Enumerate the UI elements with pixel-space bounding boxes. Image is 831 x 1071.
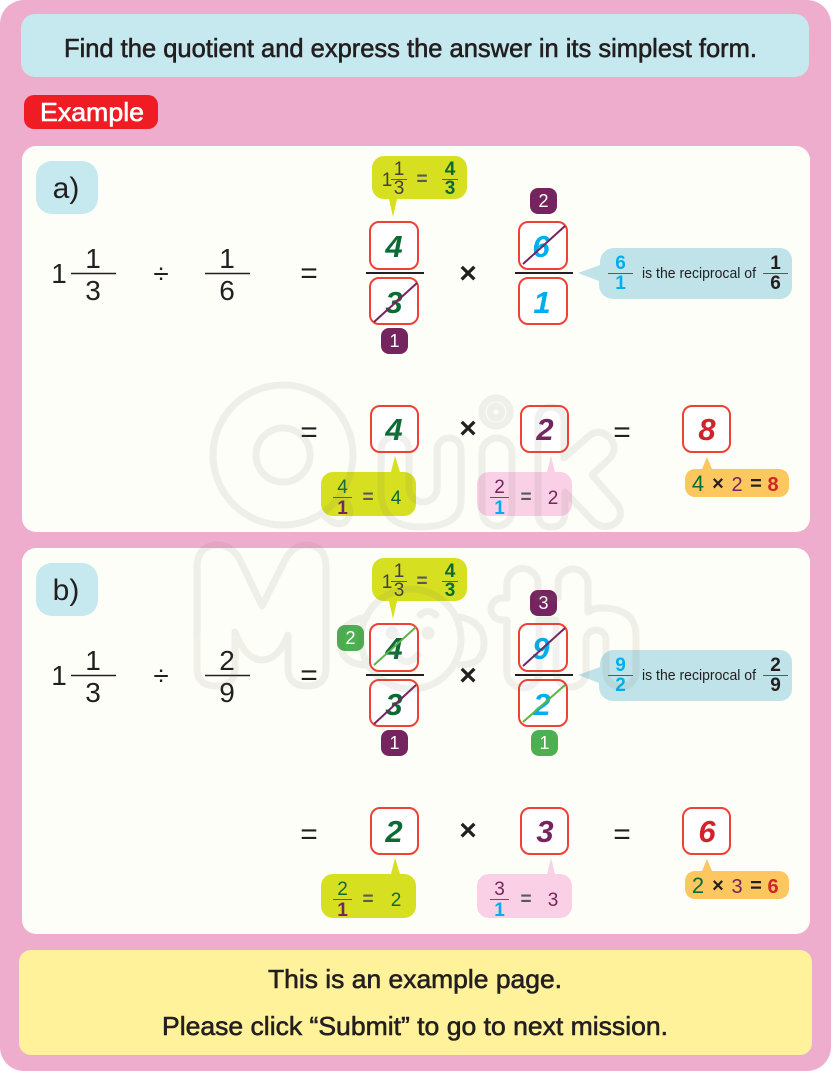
fraction four thirds with boxes bbox=[366, 222, 424, 324]
callout: reciprocal: 1 bbox=[615, 273, 626, 294]
answer box 2: 2 bbox=[384, 814, 403, 849]
callout: four over one: 4 bbox=[391, 488, 402, 509]
fraction two ninths: 9 bbox=[219, 677, 235, 708]
callout: product 4 x 2 = 8 bbox=[685, 457, 789, 497]
step badge 2: 2 bbox=[538, 191, 549, 211]
fraction two ninths: 2 bbox=[219, 645, 235, 676]
step badge green 1 bbox=[531, 730, 558, 756]
mixed number one and one third: 1 bbox=[85, 243, 101, 274]
fraction four thirds with boxes bbox=[366, 624, 424, 726]
callout: product 2 x 3 = 6 bbox=[685, 859, 789, 899]
fraction one sixth: 1 bbox=[219, 243, 235, 274]
callout: reciprocal: is the reciprocal of bbox=[642, 668, 757, 684]
callout: two over one: = bbox=[362, 889, 374, 910]
mixed number one and one third: 1 bbox=[85, 645, 101, 676]
watermark: QuikMath logo outline bbox=[197, 385, 636, 689]
multiply: × bbox=[459, 659, 477, 692]
callout: reciprocal: 9 bbox=[770, 675, 781, 696]
step badge 2 bbox=[530, 188, 557, 214]
heading panel: Find the quotient and express the answer in its simplest form. bbox=[64, 33, 757, 63]
callout: three over one: = bbox=[520, 889, 532, 910]
answer box 4: 4 bbox=[384, 412, 403, 447]
callout: product 4 x 2 = 8: 8 bbox=[767, 474, 779, 496]
callout: reciprocal: 2 bbox=[615, 675, 626, 696]
fraction nine over two with boxes bbox=[515, 624, 573, 726]
multiply: × bbox=[459, 412, 477, 445]
callout: product 4 x 2 = 8: 2 bbox=[731, 474, 743, 496]
answer box 3: 3 bbox=[536, 814, 554, 849]
panel: example b bbox=[22, 548, 810, 934]
answer box 2 bbox=[521, 406, 568, 452]
fraction six over one with boxes: 6 bbox=[532, 229, 550, 264]
callout: product 2 x 3 = 6: × bbox=[712, 875, 724, 897]
callout: reciprocal: 6 bbox=[615, 253, 626, 274]
mixed number one and one third: 3 bbox=[85, 275, 101, 306]
mixed number one and one third bbox=[51, 243, 116, 306]
callout: mixed number conversion: 4 bbox=[445, 561, 456, 582]
second line equals: = bbox=[300, 416, 318, 449]
fraction four thirds with boxes: 4 bbox=[384, 229, 403, 264]
fraction two ninths bbox=[205, 645, 250, 708]
fraction four thirds with boxes: 3 bbox=[385, 285, 403, 320]
step badge green 2 bbox=[337, 625, 364, 651]
callout: product 4 x 2 = 8: × bbox=[712, 473, 724, 495]
mixed number one and one third: 1 bbox=[51, 660, 67, 691]
step badge purple 3 bbox=[530, 590, 557, 616]
callout: product 2 x 3 = 6: 2 bbox=[692, 873, 704, 898]
callout: reciprocal: 6 bbox=[770, 273, 781, 294]
callout: three over one: 3 bbox=[494, 879, 505, 900]
callout: mixed number conversion: = bbox=[416, 169, 428, 190]
callout: mixed number conversion: 1 bbox=[382, 572, 392, 593]
footer note panel bbox=[19, 950, 812, 1055]
callout: four over one: 1 bbox=[337, 498, 348, 519]
callout: two over one: 1 bbox=[337, 900, 348, 921]
example badge: Example bbox=[40, 97, 144, 127]
callout: reciprocal: 1 bbox=[770, 253, 781, 274]
step badge purple 1: 1 bbox=[389, 733, 400, 753]
callout: reciprocal bbox=[578, 248, 792, 299]
mixed number one and one third bbox=[51, 645, 116, 708]
equals: = bbox=[613, 416, 631, 449]
callout: reciprocal: 2 bbox=[770, 655, 781, 676]
callout: two over one bbox=[321, 858, 416, 921]
result box 8: 8 bbox=[698, 412, 716, 447]
fraction four thirds with boxes: 3 bbox=[385, 687, 403, 722]
callout: mixed number conversion bbox=[372, 156, 467, 217]
footer note panel: This is an example page. bbox=[268, 964, 562, 994]
label b): b) bbox=[53, 574, 79, 607]
footer note panel: Please click “Submit” to go to next mission. bbox=[162, 1011, 668, 1041]
callout: mixed number conversion: 3 bbox=[445, 580, 455, 601]
answer box 2 bbox=[371, 808, 418, 854]
callout: mixed number conversion: 1 bbox=[394, 561, 404, 582]
step badge green 2: 2 bbox=[345, 628, 356, 648]
label a) bbox=[36, 161, 98, 214]
fraction four thirds with boxes: 4 bbox=[384, 631, 403, 666]
division sign: ÷ bbox=[153, 660, 169, 691]
result box 6: 6 bbox=[698, 814, 716, 849]
callout: mixed number conversion: 1 bbox=[382, 170, 392, 191]
label b) bbox=[36, 563, 98, 616]
callout: three over one: 3 bbox=[548, 890, 558, 911]
fraction six over one with boxes bbox=[515, 222, 573, 324]
step badge green 1: 1 bbox=[539, 733, 550, 753]
fraction nine over two with boxes: 2 bbox=[532, 687, 551, 722]
step badge 1: 1 bbox=[389, 331, 400, 351]
callout: reciprocal: is the reciprocal of bbox=[642, 266, 757, 282]
heading panel bbox=[21, 14, 809, 77]
answer box 2: 2 bbox=[535, 412, 554, 447]
fraction one sixth: 6 bbox=[219, 275, 235, 306]
multiply: × bbox=[459, 814, 477, 847]
label a): a) bbox=[53, 172, 79, 205]
second line equals: = bbox=[300, 818, 318, 851]
callout: four over one: 4 bbox=[337, 477, 348, 498]
fraction one sixth bbox=[205, 243, 250, 306]
callout: product 2 x 3 = 6: = bbox=[750, 875, 762, 897]
equals: = bbox=[300, 659, 318, 692]
step badge 1 bbox=[381, 328, 408, 354]
mixed number one and one third: 1 bbox=[51, 258, 67, 289]
callout: mixed number conversion: 4 bbox=[445, 159, 456, 180]
callout: two over one: = bbox=[520, 487, 532, 508]
callout: product 2 x 3 = 6: 6 bbox=[767, 876, 779, 898]
callout: two over one: 2 bbox=[494, 477, 505, 498]
division sign: ÷ bbox=[153, 258, 169, 289]
callout: three over one: 1 bbox=[494, 900, 505, 921]
fraction nine over two with boxes: 9 bbox=[532, 631, 550, 666]
callout: four over one bbox=[321, 456, 416, 519]
answer box 3 bbox=[521, 808, 568, 854]
callout: mixed number conversion: = bbox=[416, 571, 428, 592]
callout: mixed number conversion: 3 bbox=[445, 178, 455, 199]
callout: product 4 x 2 = 8: 4 bbox=[692, 471, 704, 496]
multiply: × bbox=[459, 257, 477, 290]
callout: reciprocal bbox=[578, 650, 792, 701]
answer box 4 bbox=[371, 406, 418, 452]
step badge purple 1 bbox=[381, 730, 408, 756]
example badge bbox=[24, 95, 158, 129]
callout: two over one bbox=[477, 456, 572, 519]
panel: example a bbox=[22, 146, 810, 532]
result box 8 bbox=[683, 406, 730, 452]
callout: mixed number conversion bbox=[372, 558, 467, 619]
result box 6 bbox=[683, 808, 730, 854]
callout: two over one: 2 bbox=[391, 890, 401, 911]
fraction six over one with boxes: 1 bbox=[533, 285, 551, 320]
callout: product 4 x 2 = 8: = bbox=[750, 473, 762, 495]
callout: two over one: 1 bbox=[494, 498, 505, 519]
callout: two over one: 2 bbox=[337, 879, 348, 900]
callout: mixed number conversion: 3 bbox=[394, 580, 404, 601]
callout: mixed number conversion: 3 bbox=[394, 178, 404, 199]
step badge purple 3: 3 bbox=[538, 593, 549, 613]
callout: product 2 x 3 = 6: 3 bbox=[731, 876, 743, 898]
callout: three over one bbox=[477, 858, 572, 921]
callout: two over one: 2 bbox=[548, 488, 558, 509]
equals: = bbox=[300, 257, 318, 290]
callout: mixed number conversion: 1 bbox=[394, 159, 404, 180]
callout: reciprocal: 9 bbox=[615, 655, 626, 676]
callout: four over one: = bbox=[362, 487, 374, 508]
equals: = bbox=[613, 818, 631, 851]
mixed number one and one third: 3 bbox=[85, 677, 101, 708]
